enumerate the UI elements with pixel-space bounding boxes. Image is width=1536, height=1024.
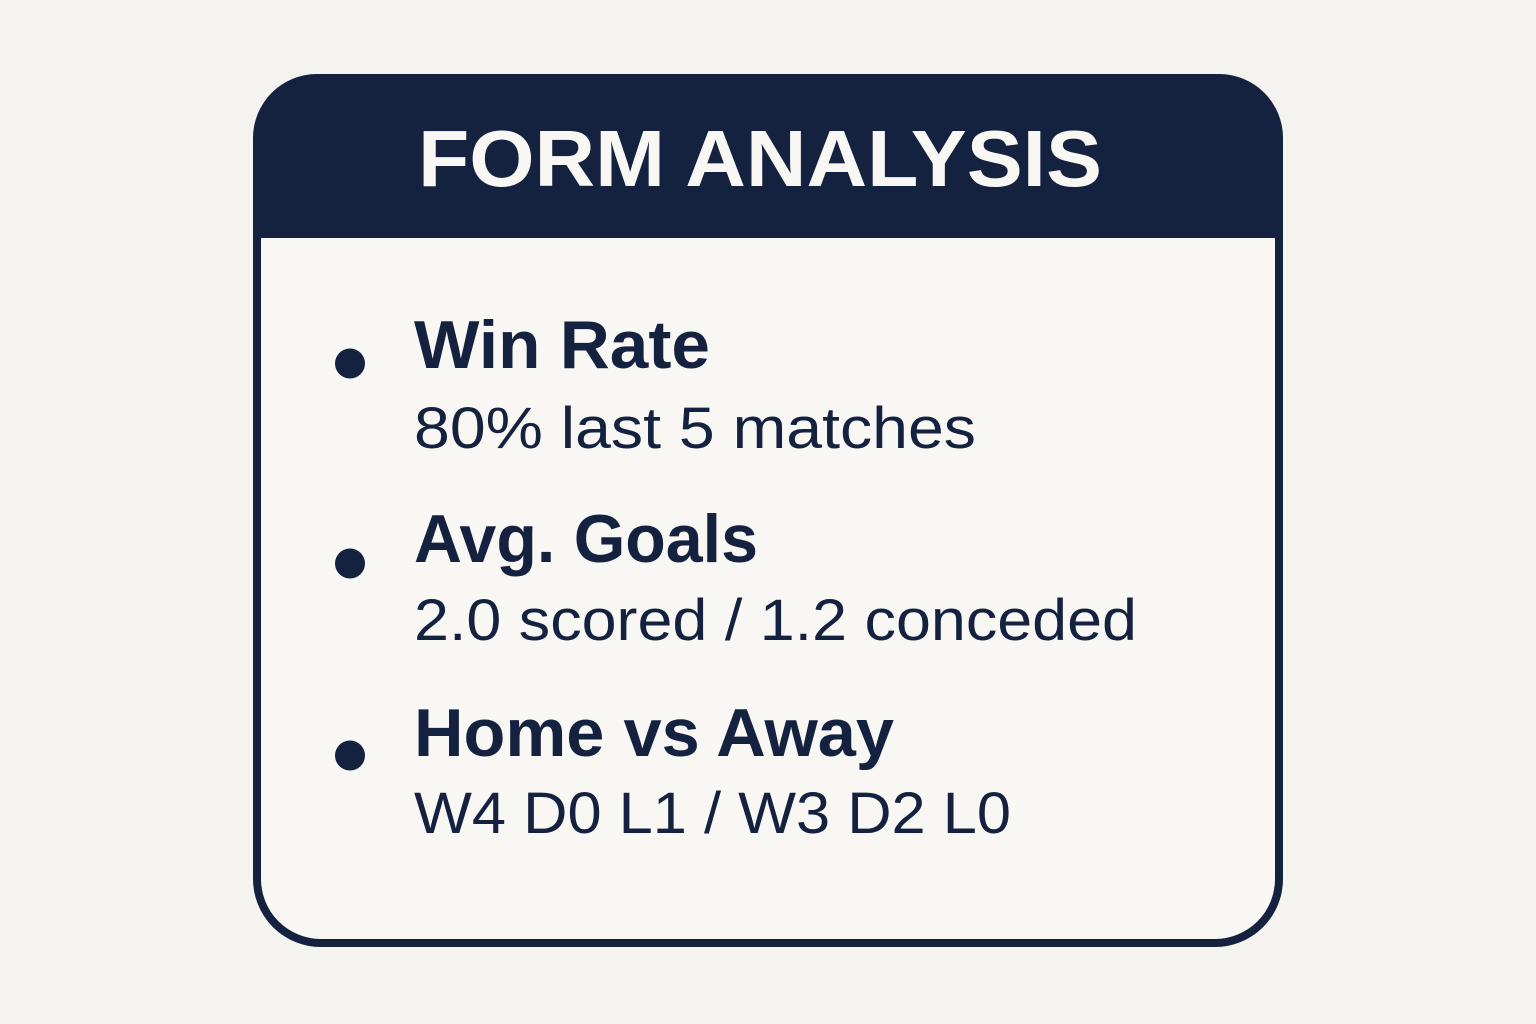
bullet: average goals (335, 548, 365, 578)
item: home vs away (335, 695, 1011, 846)
heading: average goals: Avg. Goals (414, 501, 758, 577)
text: win rate value: 80% last 5 matches (414, 396, 976, 461)
item: win rate (335, 307, 976, 461)
bullet: home vs away (335, 740, 365, 770)
bullet: win rate (335, 348, 365, 378)
heading: win rate: Win Rate (414, 307, 710, 383)
heading: home vs away: Home vs Away (414, 695, 894, 771)
header band (253, 74, 1283, 238)
item: average goals (335, 501, 1137, 653)
text: average goals value: 2.0 scored / 1.2 conceded (414, 588, 1137, 653)
panel: form analysis card (253, 74, 1283, 943)
text: home vs away value: W4 D0 L1 / W3 D2 L0 (414, 781, 1011, 846)
title: FORM ANALYSIS (418, 114, 1102, 203)
